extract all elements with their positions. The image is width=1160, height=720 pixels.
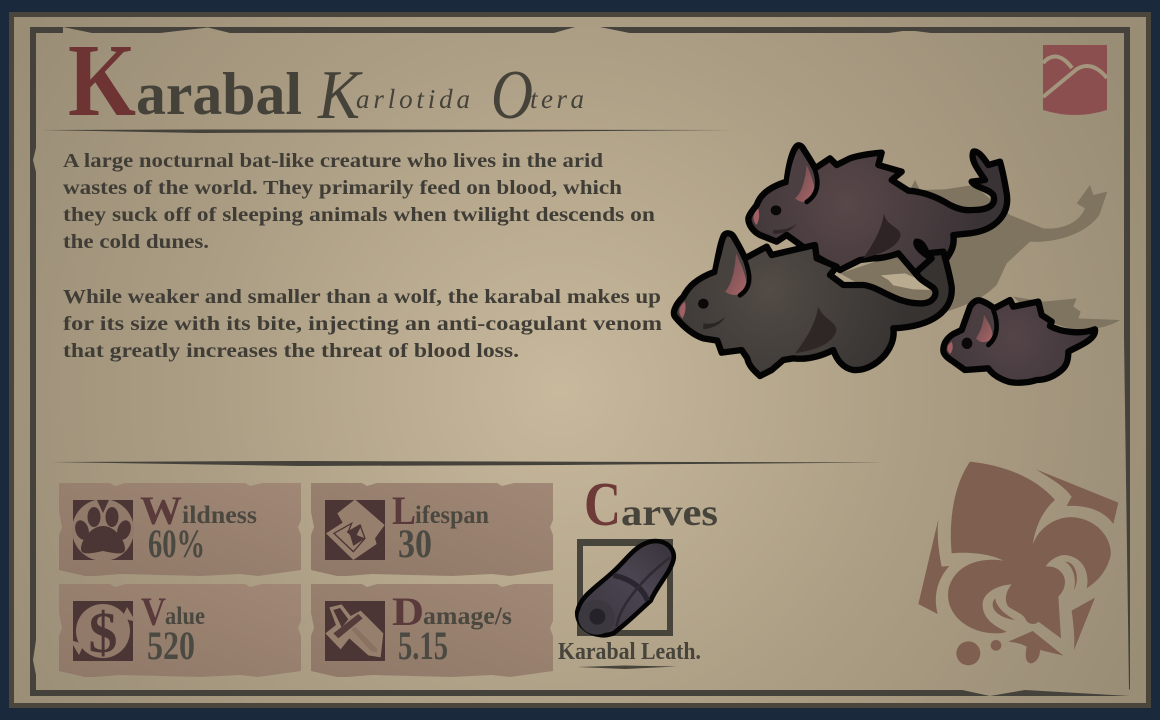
light gap between bodies: [881, 273, 933, 290]
stat: value: 520: [147, 623, 195, 668]
stat: lifespan: 30: [398, 521, 432, 566]
item name: Karabal Leath.: [558, 639, 701, 665]
description text: the cold dunes.: [63, 231, 209, 253]
item frame: [577, 539, 673, 636]
lower karabal: [674, 233, 952, 376]
description text: A large nocturnal bat-like creature who lives in the arid: [63, 150, 603, 172]
stat: wildness: W: [140, 488, 182, 533]
title: [68, 23, 302, 138]
icon: paw: [72, 499, 134, 561]
stats divider: [50, 461, 885, 466]
upper karabal: [748, 145, 1007, 277]
stat: wildness: ildness: [182, 502, 257, 529]
icon: dollar: [70, 600, 136, 665]
stat: lifespan: L: [392, 488, 416, 533]
carves heading: arves: [621, 492, 718, 534]
stat: damage: 5.15: [398, 623, 448, 668]
scientific name script: tera: [530, 84, 584, 114]
stat: damage: amage/s: [423, 603, 512, 630]
description text: [63, 150, 662, 362]
stat: value: V: [141, 589, 166, 634]
scientific name script: arlotida: [356, 84, 470, 114]
scientific name script: [317, 57, 584, 134]
title divider: [42, 130, 733, 133]
stat: value: [59, 584, 301, 677]
stat: lifespan: ifespan: [415, 502, 489, 529]
description text: they suck off of sleeping animals when twilight descends on: [63, 204, 655, 226]
stat: damage: [311, 584, 553, 677]
icon: sword: [325, 601, 385, 661]
scientific name script: K: [317, 57, 363, 134]
watermark emblem: [918, 462, 1118, 665]
description text: that greatly increases the threat of blood loss.: [63, 340, 519, 362]
icon: dollar: $: [88, 600, 118, 665]
description text: While weaker and smaller than a wolf, the karabal makes up: [63, 286, 661, 308]
creatures illustration: [674, 145, 1120, 383]
item: karabal leather: [558, 539, 701, 669]
icon: hourglass: [325, 499, 385, 560]
stat: wildness: 60%: [148, 521, 205, 566]
icon: leather roll: [577, 541, 674, 635]
logo emblem: [1043, 45, 1107, 115]
small karabal: [943, 300, 1095, 383]
description text: wastes of the world. They primarily feed on blood, which: [63, 177, 622, 199]
stat: lifespan: [311, 483, 553, 576]
item underline: [577, 666, 677, 669]
carves heading: C: [584, 471, 621, 539]
description text: for its size with its bite, injecting an anti-coagulant venom: [63, 313, 662, 335]
scientific name script: O: [491, 57, 533, 134]
title: arabal: [136, 61, 302, 127]
stat: wildness: [59, 483, 301, 576]
carves heading: [584, 471, 718, 539]
stat: damage: D: [392, 589, 424, 634]
stat: value: alue: [165, 603, 205, 630]
creature shadows: [840, 180, 1120, 330]
title: K: [68, 23, 136, 138]
